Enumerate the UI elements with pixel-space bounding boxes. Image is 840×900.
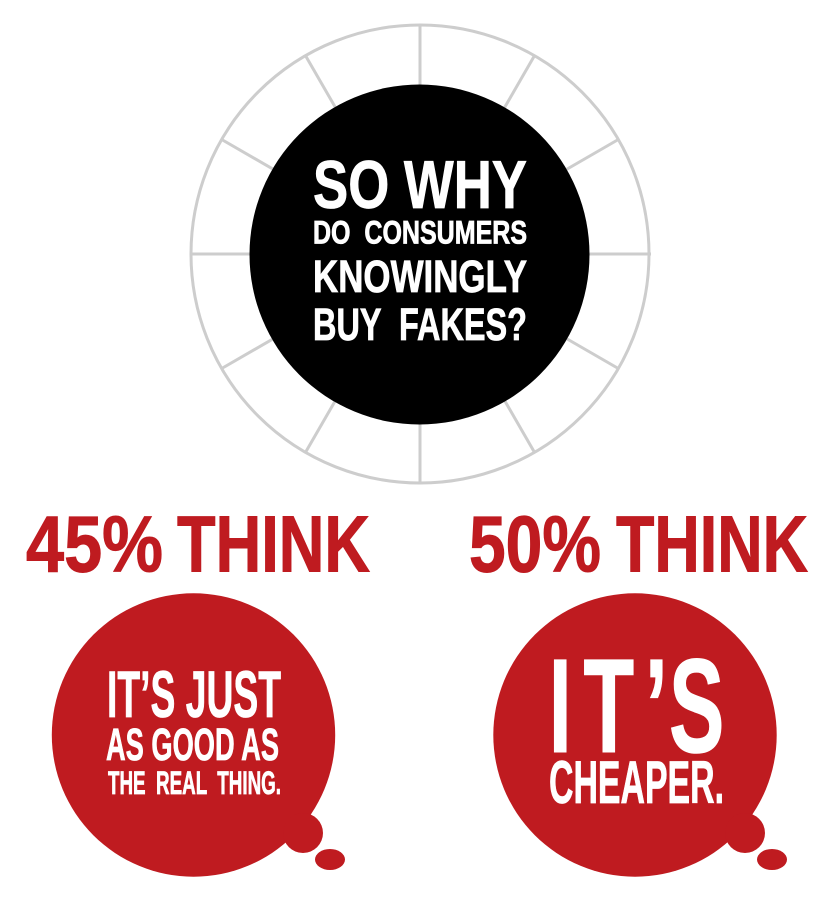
thought bubble: it's cheaper [493,593,787,877]
heading: 45% think: 45% [26,500,163,588]
spoked wheel ring [191,25,651,483]
heading: 45% think: THINK [177,500,370,588]
heading: 50% think: 50% [469,500,601,588]
question text: DO CONSUMERS [313,214,527,250]
thought bubble: as good as the real thing [52,593,345,877]
question text: KNOWINGLY [313,251,527,302]
central black circle with question [250,84,590,424]
bubble text: IT’S JUST [107,657,281,731]
bubble text: THE REAL THING. [108,765,281,801]
question text: SO WHY [313,147,527,223]
question text: BUY FAKES? [313,299,527,350]
bubble text: AS GOOD AS [106,719,279,770]
question text [313,147,527,350]
bubble text [106,657,281,801]
bubble text: IT’S [549,631,724,781]
